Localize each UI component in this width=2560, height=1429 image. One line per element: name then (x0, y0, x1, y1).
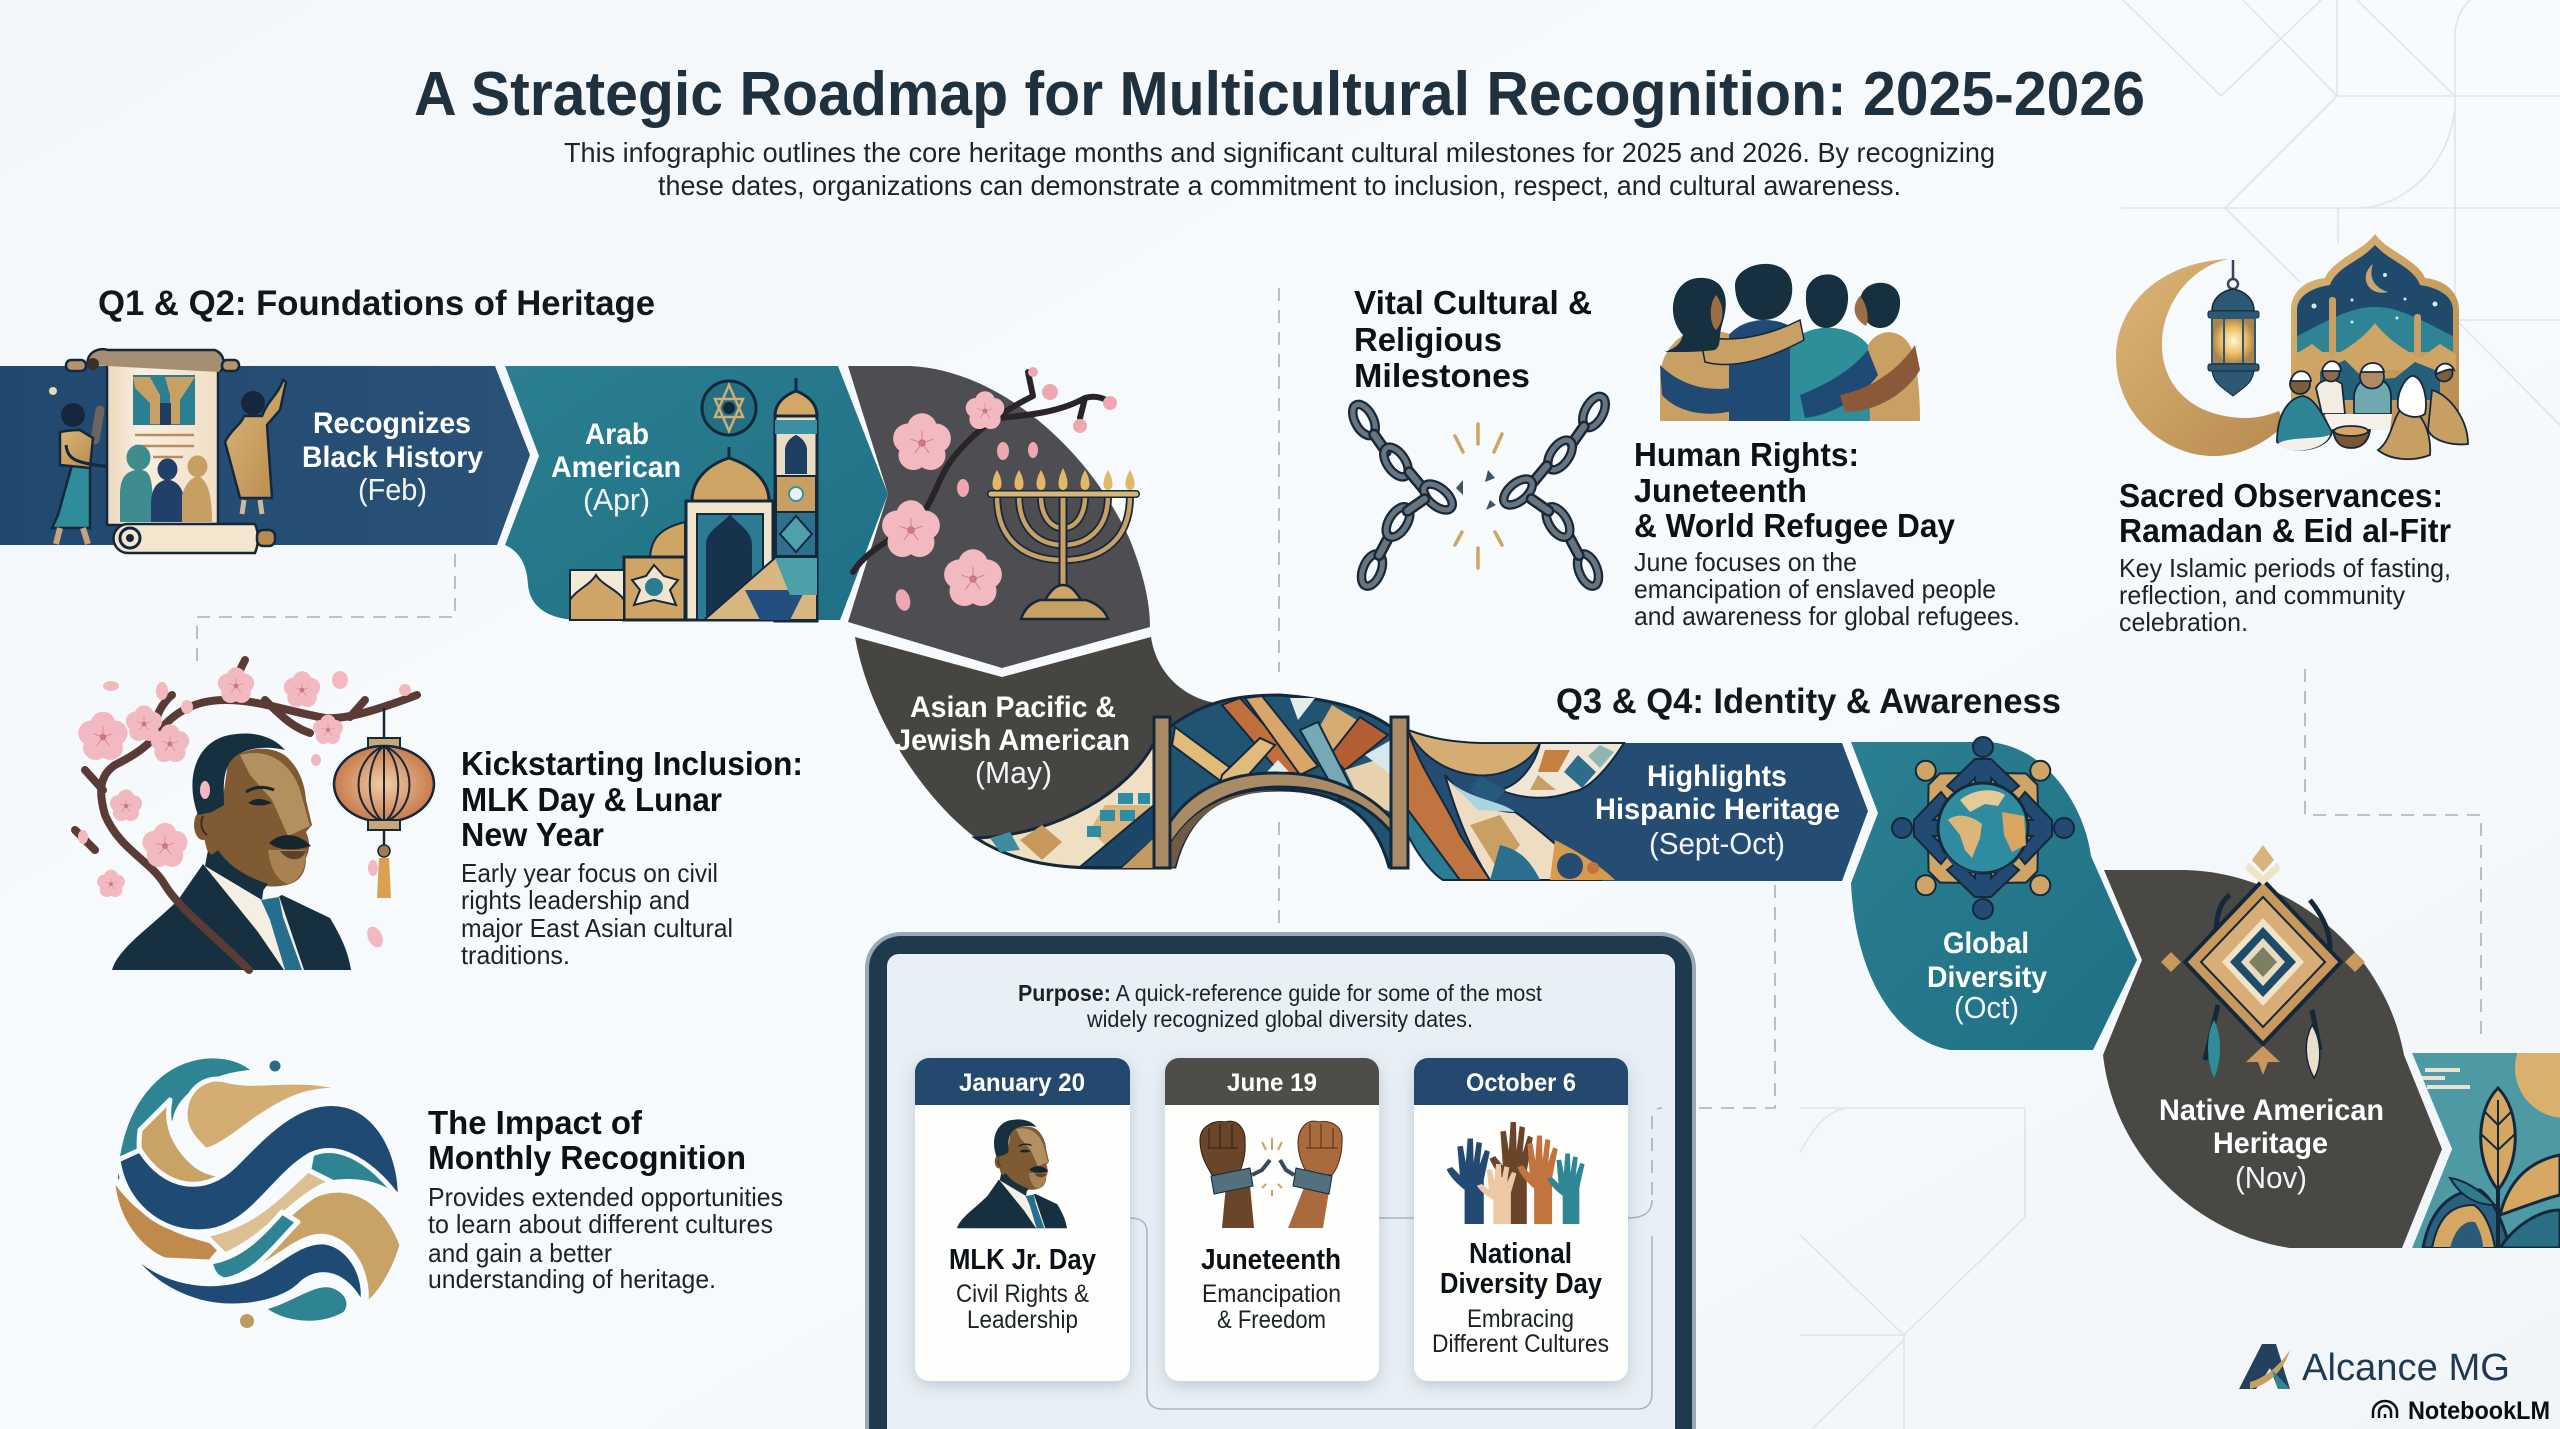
label: Global Diversity: Global (1943, 927, 2029, 960)
label: Asian Pacific and Jewish American (895, 691, 1130, 790)
seated figures (2277, 361, 2468, 459)
purpose statement: Purpose: A quick-reference guide for some of the most (1018, 980, 1543, 1006)
illustration: crescent, lantern and gathering (2116, 234, 2468, 459)
card: January 20: January 20 (959, 1069, 1085, 1097)
text: Human Rights (1634, 436, 2020, 631)
icon: woven diamond with feathers (2161, 845, 2365, 1078)
label: Asian Pacific and Jewish American: Asian Pacific & (910, 691, 1116, 724)
text: Human Rights: & World Refugee Day (1634, 507, 1956, 544)
text: Sacred Observances: Ramadan & Eid al-Fitr (2119, 512, 2451, 549)
icon: mosque architecture (570, 378, 817, 621)
label: National Diversity Day: National (1469, 1238, 1572, 1270)
label: Juneteenth: Emancipation (1202, 1280, 1341, 1308)
label: Recognizes Black History: Black History (302, 441, 483, 474)
text: Sacred Observances: Key Islamic periods of fasting, (2119, 553, 2451, 583)
label: Native American Heritage: (Nov) (2235, 1160, 2307, 1195)
label: National Diversity Day: Diversity Day (1440, 1268, 1602, 1300)
label: Native American Heritage: Native American (2159, 1094, 2384, 1127)
icon: raised diverse hands (1447, 1122, 1585, 1224)
left patchwork ribbon (976, 743, 1154, 868)
label: MLK Jr. Day: Civil Rights & (956, 1280, 1089, 1308)
icon: globe with ring of people (1892, 737, 2074, 919)
label: MLK Jr. Day: Leadership (967, 1306, 1078, 1334)
lantern (334, 708, 434, 898)
text: The Impact of Monthly Recognition: and gain a better (428, 1238, 612, 1268)
label: Arab American: (Apr) (583, 482, 650, 517)
blossoms (78, 667, 411, 950)
label: Asian Pacific and Jewish American: (May) (975, 755, 1052, 790)
icon: menorah (991, 468, 1136, 619)
text: Sacred Observances (2119, 477, 2451, 637)
roadmap segment: Black History (Feb) (0, 349, 530, 553)
text: Kickstarting Inclusion: Early year focus on civil (461, 858, 718, 888)
label: MLK Jr. Day (949, 1244, 1096, 1334)
subtitle: these dates, organizations can demonstrate a commitment to inclusion, respect, and cultural awareness. (658, 170, 1901, 201)
heading: Q3 and Q4: Q3 & Q4: Identity & Awareness (1556, 682, 2061, 721)
text: Human Rights: Juneteenth (1634, 472, 1807, 509)
card: October 6: October 6 (1466, 1069, 1576, 1097)
heading: Vital Cultural and Religious Milestones (1354, 284, 1592, 394)
illustration: MLK with cherry branch and lantern (75, 660, 434, 970)
label: Juneteenth: Juneteenth (1201, 1244, 1341, 1276)
text: Kickstarting Inclusion: New Year (461, 816, 604, 853)
icon: raised fists breaking chain (1200, 1121, 1342, 1228)
icon: swirling waves emblem (112, 1056, 402, 1328)
icon: MLK portrait (957, 1119, 1067, 1228)
subtitle (564, 137, 1995, 201)
branch (75, 660, 417, 970)
text: Sacred Observances: Sacred Observances: (2119, 477, 2443, 514)
label: Global Diversity (1927, 927, 2047, 1025)
text: Kickstarting Inclusion: traditions. (461, 940, 570, 970)
label: Native American Heritage: Heritage (2213, 1127, 2328, 1160)
icon: scroll with two figures (49, 349, 286, 553)
subtitle: This infographic outlines the core heritage months and significant cultural milestones for 2025 and 2026. By recognizing (564, 137, 1995, 168)
text: Kickstarting Inclusion: rights leadership and (461, 885, 690, 915)
label: Recognizes Black History (302, 407, 483, 507)
text: The Impact of Monthly Recognition (428, 1104, 783, 1294)
label: Global Diversity: (Oct) (1954, 990, 2019, 1025)
text: The Impact of Monthly Recognition: Monthly Recognition (428, 1139, 746, 1176)
purpose statement: widely recognized global diversity dates. (1086, 1006, 1473, 1032)
patchwork bridge (976, 695, 1408, 868)
woven arch (1170, 695, 1391, 867)
text: Human Rights: and awareness for global refugees. (1634, 601, 2020, 631)
heading: Vital Cultural and Religious Milestones: Milestones (1354, 357, 1530, 394)
label: Juneteenth (1201, 1244, 1341, 1334)
label: National Diversity Day (1432, 1238, 1609, 1358)
heading: Q1 and Q2: Q1 & Q2: Foundations of Heritage (98, 284, 655, 323)
title: A Strategic Roadmap for Multicultural Recognition: 2025-2026 (414, 60, 2145, 129)
label: Asian Pacific and Jewish American: Jewish American (895, 724, 1130, 757)
text: Human Rights: June focuses on the (1634, 547, 1857, 577)
card: June 19 (1165, 1058, 1379, 1381)
logo: Alcance MG: Alcance MG (2302, 1347, 2510, 1389)
card: January 20 (915, 1058, 1130, 1381)
text: Kickstarting Inclusion: major East Asian cultural (461, 913, 733, 943)
text: The Impact of Monthly Recognition: understanding of heritage. (428, 1264, 716, 1294)
right patchwork ribbon (1408, 730, 1624, 880)
icon: broken chains (1348, 393, 1610, 589)
label: Juneteenth: & Freedom (1217, 1306, 1326, 1334)
watermark: NotebookLM: NotebookLM (2408, 1397, 2550, 1425)
roadmap segment: Highlights Hispanic Heritage (Sept-Oct) (1408, 729, 1868, 881)
text: Sacred Observances: reflection, and community (2119, 580, 2405, 610)
roadmap segment: Arab American (Apr) (505, 366, 888, 621)
tablet panel: quick-reference guide (865, 932, 1696, 1429)
roadmap segment: Native American Heritage (Nov) (2103, 845, 2442, 1248)
dashed connectors (197, 288, 2481, 1108)
icon: cherry blossom branch (853, 367, 1117, 612)
heading: Vital Cultural and Religious Milestones: Vital Cultural & (1354, 284, 1592, 321)
arched night scene (2291, 234, 2459, 430)
label: MLK Jr. Day: MLK Jr. Day (949, 1244, 1096, 1276)
text: Kickstarting Inclusion: Kickstarting Inclusion: (461, 745, 803, 782)
text: The Impact of Monthly Recognition: to learn about different cultures (428, 1209, 773, 1239)
hanging lantern (2208, 260, 2259, 396)
label: Recognizes Black History: (Feb) (358, 472, 427, 507)
text: Human Rights: Human Rights: (1634, 436, 1859, 473)
card: June 19: June 19 (1227, 1069, 1317, 1097)
label: Recognizes Black History: Recognizes (313, 407, 471, 440)
label: Global Diversity: Diversity (1927, 961, 2047, 994)
roadmap segment: Global Diversity (Oct) (1851, 737, 2137, 1050)
purpose statement (1018, 980, 1543, 1032)
roadmap end panel with leaves and sun (2412, 1053, 2560, 1248)
roadmap segment: Asian Pacific and Jewish American (May) (855, 637, 1215, 838)
text: Kickstarting Inclusion (461, 745, 803, 970)
roadmap segment: blossom and menorah (848, 366, 1150, 668)
label: Arab American: American (551, 451, 681, 484)
text: Sacred Observances: celebration. (2119, 607, 2248, 637)
label: Highlights Hispanic Heritage (1595, 760, 1840, 861)
heading: Vital Cultural and Religious Milestones: Religious (1354, 321, 1502, 358)
text: The Impact of Monthly Recognition: The Impact of (428, 1104, 643, 1141)
portrait (112, 734, 351, 970)
label: Highlights Hispanic Heritage: (Sept-Oct) (1649, 826, 1785, 861)
label: National Diversity Day: Different Cultures (1432, 1330, 1609, 1358)
card: October 6 (1414, 1058, 1628, 1381)
crescent moon (2116, 259, 2285, 456)
text: Human Rights: emancipation of enslaved people (1634, 574, 1996, 604)
label: Arab American (551, 418, 681, 517)
text: The Impact of Monthly Recognition: Provides extended opportunities (428, 1182, 783, 1212)
label: Arab American: Arab (585, 418, 649, 451)
text: Kickstarting Inclusion: MLK Day & Lunar (461, 781, 722, 818)
icon: group embrace (1660, 264, 1920, 421)
bridge piers (1154, 717, 1408, 868)
label: National Diversity Day: Embracing (1467, 1305, 1574, 1333)
label: Highlights Hispanic Heritage: Hispanic Heritage (1595, 793, 1840, 826)
label: Highlights Hispanic Heritage: Highlights (1647, 760, 1787, 793)
label: Native American Heritage (2159, 1094, 2384, 1195)
